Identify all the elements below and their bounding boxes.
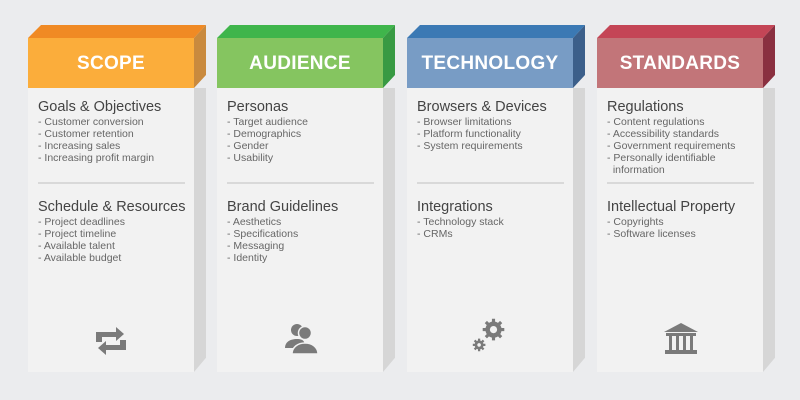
text: goals (38, 99, 161, 164)
text: regulations: Regulations (607, 99, 684, 115)
column: technology (407, 25, 585, 372)
icon: gears (472, 318, 504, 352)
text: integrations: - Technology stack (417, 216, 504, 228)
text: regulations (607, 99, 735, 176)
header: audience: AUDIENCE (249, 53, 351, 74)
text: ip: Intellectual Property (607, 199, 735, 215)
header: technology: TECHNOLOGY (421, 53, 559, 74)
text: brand: - Messaging (227, 240, 284, 252)
icon: repeat arrows (96, 327, 126, 355)
text: browsers: - Browser limitations (417, 116, 512, 128)
text: schedule: - Project timeline (38, 228, 116, 240)
text: personas: - Usability (227, 152, 273, 164)
text: ip (607, 199, 736, 240)
text: brand: - Aesthetics (227, 216, 281, 228)
column: scope (28, 25, 206, 372)
text: personas: - Target audience (227, 116, 308, 128)
text: brand: - Specifications (227, 228, 298, 240)
text: integrations (417, 199, 504, 240)
text: regulations: - Government requirements (607, 140, 735, 152)
text: ip: - Software licenses (607, 228, 696, 240)
column: standards (597, 25, 775, 372)
text: personas: - Gender (227, 140, 268, 152)
header: scope: SCOPE (77, 53, 145, 74)
text: goals: - Customer retention (38, 128, 134, 140)
text: schedule: - Available talent (38, 240, 115, 252)
header: technology (407, 25, 585, 88)
text: regulations: - Content regulations (607, 116, 704, 128)
text: integrations: Integrations (417, 199, 493, 215)
column: audience (217, 25, 395, 372)
header: audience (217, 25, 395, 88)
text: browsers: - System requirements (417, 140, 523, 152)
text: regulations: - Personally identifiable (607, 152, 716, 164)
text: goals: - Increasing sales (38, 140, 120, 152)
text: brand (227, 199, 338, 264)
text: brand: Brand Guidelines (227, 199, 338, 215)
text: schedule: - Available budget (38, 252, 121, 264)
text: browsers: Browsers & Devices (417, 99, 547, 115)
text: regulations: information (613, 164, 665, 176)
text: goals: - Customer conversion (38, 116, 144, 128)
header: standards (597, 25, 775, 88)
text: goals: Goals & Objectives (38, 99, 161, 115)
text: goals: - Increasing profit margin (38, 152, 154, 164)
text: personas: - Demographics (227, 128, 301, 140)
text: browsers (417, 99, 547, 152)
text: schedule: Schedule & Resources (38, 199, 186, 215)
text: personas: Personas (227, 99, 288, 115)
text: regulations: - Accessibility standards (607, 128, 719, 140)
icon: building (664, 323, 698, 354)
header: scope (28, 25, 206, 88)
text: personas (227, 99, 308, 164)
text: brand: - Identity (227, 252, 267, 264)
text: integrations: - CRMs (417, 228, 453, 240)
text: browsers: - Platform functionality (417, 128, 521, 140)
text: schedule: - Project deadlines (38, 216, 125, 228)
header: standards: STANDARDS (620, 53, 740, 74)
text: ip: - Copyrights (607, 216, 664, 228)
text: schedule (38, 199, 186, 264)
icon: people (285, 324, 318, 354)
